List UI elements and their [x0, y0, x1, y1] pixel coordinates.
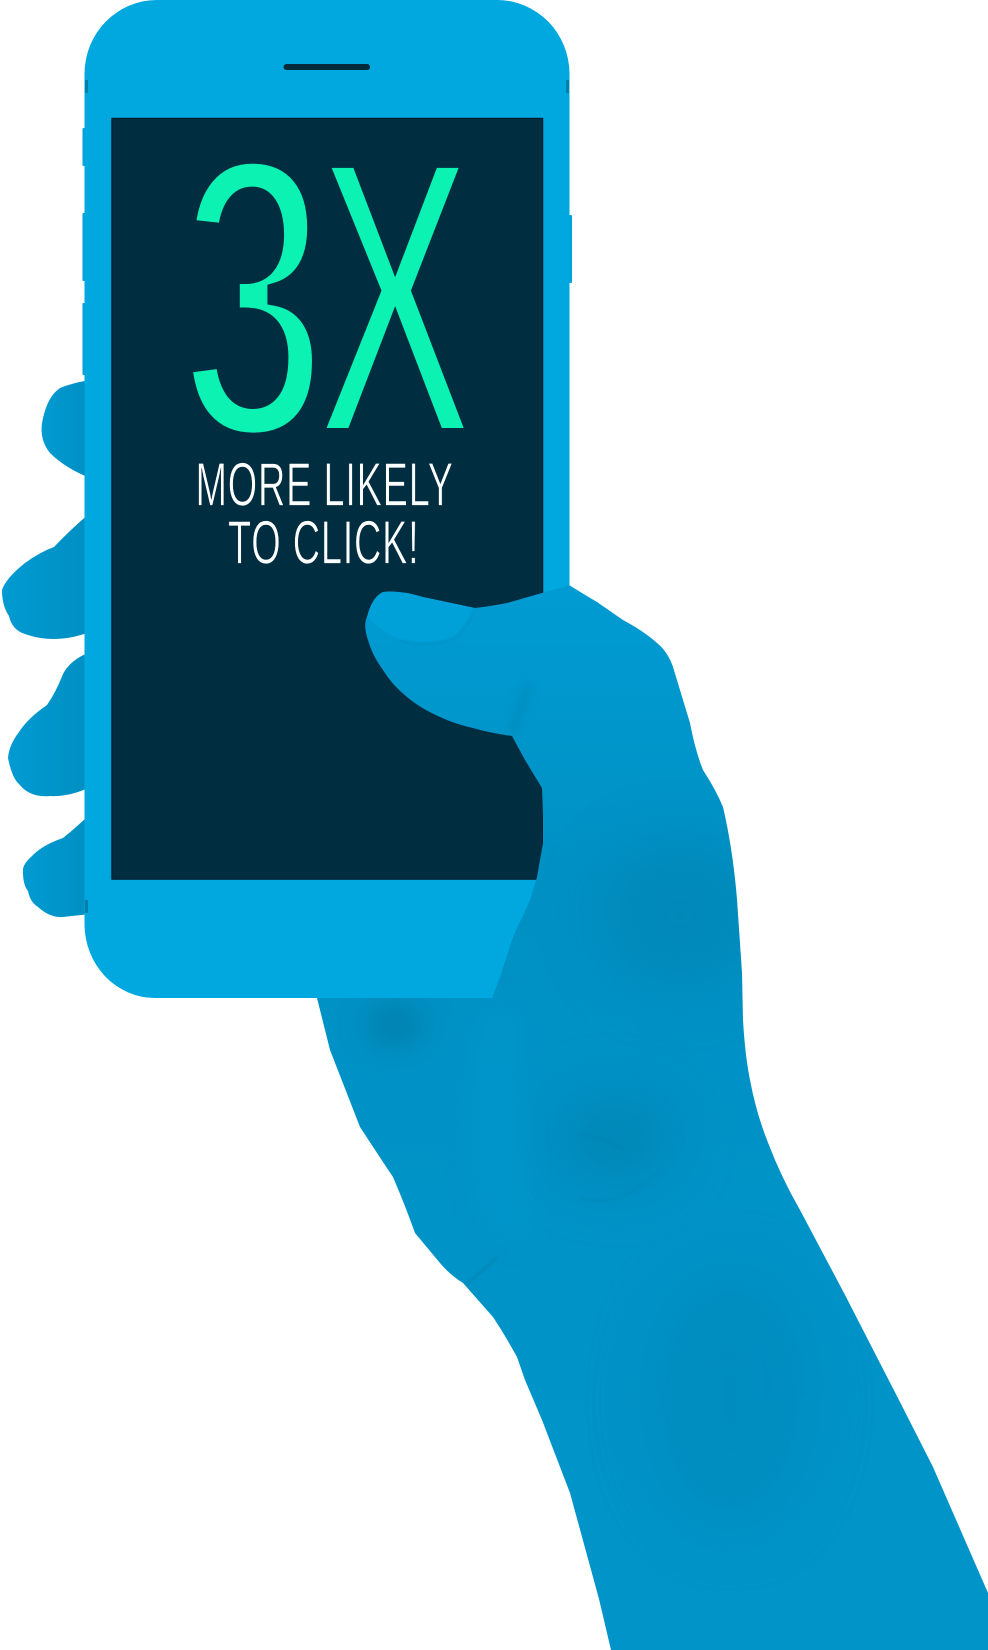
big stat: 3X: 3 [178, 68, 329, 526]
caption: more likely to click: MORE LIKELY [196, 450, 454, 519]
finger 1 [42, 380, 90, 478]
side buttons [82, 128, 86, 166]
wrist crease [466, 1257, 497, 1284]
caption: more likely to click: TO CLICK! [228, 508, 419, 577]
palm creases [578, 1135, 660, 1201]
caption: more likely to click [196, 450, 454, 577]
thumb knuckle fold [514, 692, 527, 726]
speaker [284, 64, 370, 70]
big stat: 3X: X [312, 68, 479, 526]
thumb nail highlight [367, 592, 475, 644]
finger 2 [2, 513, 90, 639]
hand silhouette [317, 585, 988, 1650]
phone body [82, 0, 572, 998]
finger 3 [8, 652, 90, 796]
antenna notches [85, 80, 88, 93]
hand shading [364, 592, 778, 1487]
finger 4 [23, 814, 90, 917]
hand and arm with thumb over phone [317, 585, 988, 1650]
big stat: 3X [178, 68, 479, 526]
phone case [84, 0, 570, 998]
screen [112, 118, 542, 879]
fingers behind phone [2, 380, 90, 917]
